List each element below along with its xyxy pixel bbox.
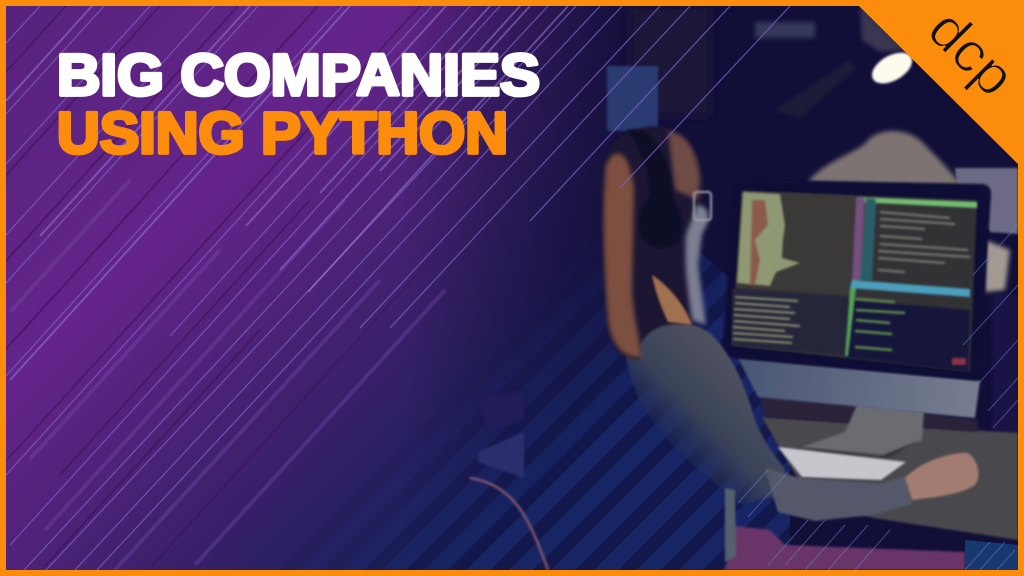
- background colleague: [808, 131, 962, 186]
- title: [58, 52, 540, 156]
- monitor chin: [738, 358, 980, 418]
- monitor screen: [732, 191, 977, 372]
- keyboard: [778, 447, 906, 480]
- monitor bezel: [722, 180, 991, 381]
- title line 2: USING PYTHON: [57, 101, 508, 166]
- background office scene: [607, 6, 1018, 435]
- woman sleeve: [765, 468, 912, 521]
- woman face: [685, 205, 709, 325]
- side table: [478, 432, 524, 478]
- screen left code: [733, 192, 800, 343]
- woman body: [625, 320, 790, 505]
- woman hair: [601, 126, 704, 360]
- glasses: [694, 192, 711, 220]
- woman hand: [905, 453, 979, 500]
- title line 1: BIG COMPANIES: [57, 43, 540, 108]
- headphones: [626, 129, 682, 248]
- bottom purple furniture: [725, 526, 965, 570]
- desk: [762, 417, 1018, 540]
- monitor stand: [802, 405, 924, 458]
- monitor: [722, 180, 991, 418]
- stripe band overlay: [329, 252, 790, 570]
- lamp light: [870, 50, 914, 86]
- chair leg: [470, 478, 548, 570]
- woman: [601, 126, 979, 562]
- corner triangle: [859, 6, 1018, 164]
- screen right code: [845, 197, 977, 365]
